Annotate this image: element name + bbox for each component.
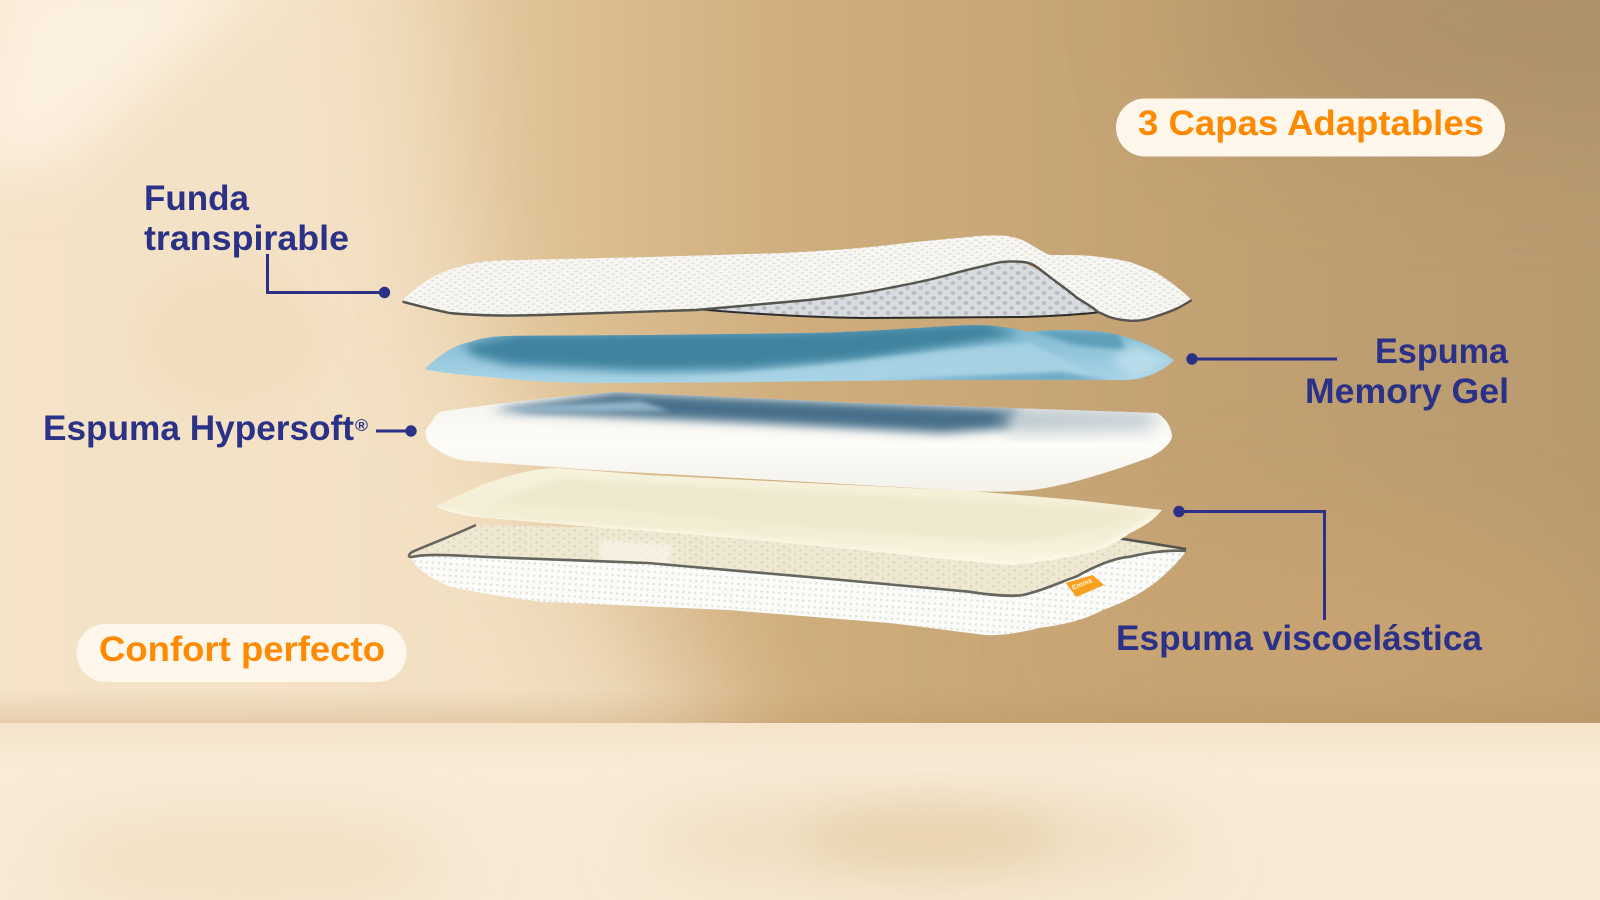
label: Espuma Hypersoft: Espuma Hypersoft — [43, 409, 354, 448]
layer: espuma hypersoft — [425, 392, 1172, 492]
pill: 3 Capas Adaptables: 3 Capas Adaptables — [1138, 104, 1484, 143]
leader line: Espuma Hypersoft — [376, 425, 417, 437]
label: Funda transpirable: Funda — [144, 179, 250, 218]
label: Espuma Memory Gel — [1305, 332, 1509, 411]
leader line: Espuma Memory Gel — [1186, 353, 1337, 365]
label: Espuma viscoelastica: Espuma viscoelástica — [1116, 619, 1483, 658]
icon: orange brand tag: Emma — [1071, 577, 1093, 592]
pill: Confort perfecto — [76, 624, 406, 682]
label: Espuma Memory Gel: Memory Gel — [1305, 372, 1509, 411]
label: Funda transpirable: transpirable — [144, 219, 349, 258]
pillow exploded layers — [402, 235, 1192, 635]
layer: espuma memory gel — [425, 322, 1176, 384]
layer: espuma viscoelastica — [436, 468, 1162, 572]
label: Espuma Hypersoft: ® — [355, 416, 368, 435]
icon: orange brand tag — [1066, 575, 1104, 597]
layer: funda transpirable — [402, 235, 1192, 321]
label: Funda transpirable — [144, 179, 349, 258]
leader line: Espuma viscoelastica — [1173, 506, 1324, 620]
pill: 3 Capas Adaptables — [1116, 98, 1505, 156]
pill: Confort perfecto: Confort perfecto — [99, 630, 385, 669]
layer: bottom cover — [409, 525, 1186, 635]
label: Espuma Memory Gel: Espuma — [1375, 332, 1509, 371]
leader line: Funda transpirable — [268, 254, 390, 298]
